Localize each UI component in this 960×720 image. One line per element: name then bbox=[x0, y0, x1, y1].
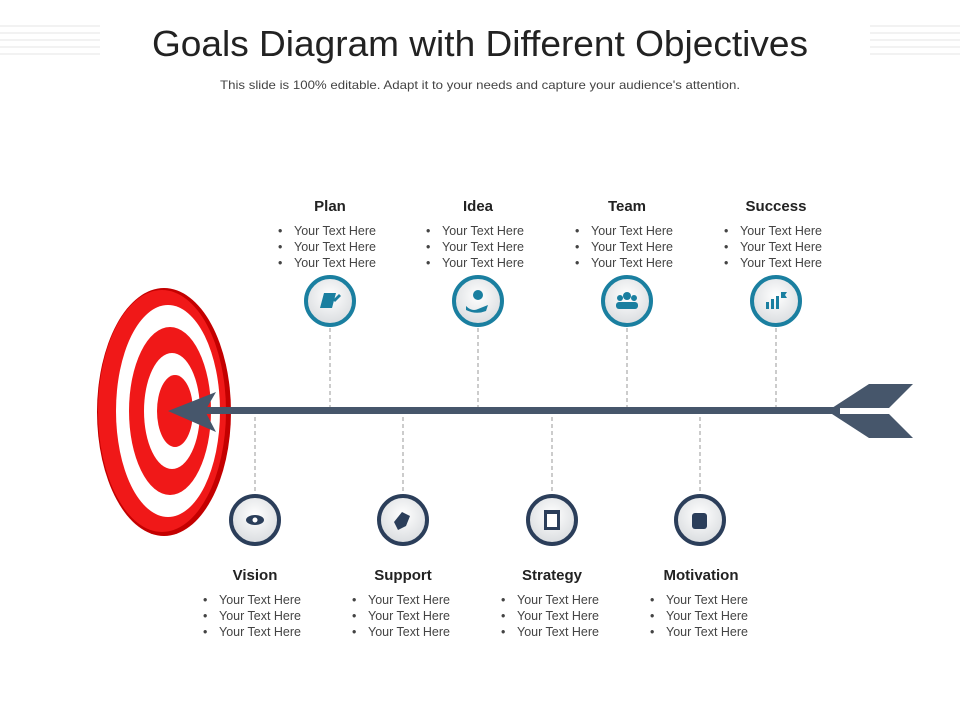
item: Idea: • bbox=[426, 224, 430, 238]
item: Support: • bbox=[352, 625, 356, 639]
top items bbox=[278, 198, 822, 325]
item: Strategy: Your Text Here bbox=[517, 593, 599, 607]
item: Team bbox=[575, 198, 673, 325]
item: Motivation: Your Text Here bbox=[666, 625, 748, 639]
item: Idea: Your Text Here bbox=[442, 240, 524, 254]
item: Support: Support bbox=[374, 567, 432, 584]
icon: target bbox=[97, 288, 231, 536]
item: Success: Your Text Here bbox=[740, 240, 822, 254]
item: Motivation bbox=[650, 496, 748, 639]
item: Motivation: • bbox=[650, 625, 654, 639]
item: Motivation: Motivation bbox=[664, 567, 738, 584]
item: Idea bbox=[426, 198, 524, 325]
item: Vision: Vision bbox=[233, 567, 277, 584]
item: Support: • bbox=[352, 609, 356, 623]
subtitle: This slide is 100% editable. Adapt it to your needs and capture your audience's attention. bbox=[220, 78, 740, 92]
item: Strategy: Your Text Here bbox=[517, 609, 599, 623]
item: Vision: • bbox=[203, 609, 207, 623]
item: Idea: Your Text Here bbox=[442, 256, 524, 270]
item: Plan: Your Text Here bbox=[294, 240, 376, 254]
item: Plan: • bbox=[278, 240, 282, 254]
item: Team: • bbox=[575, 256, 579, 270]
item: Success bbox=[724, 198, 822, 325]
item: Vision: • bbox=[203, 625, 207, 639]
item: Strategy: • bbox=[501, 625, 505, 639]
item: Team: • bbox=[575, 240, 579, 254]
item: Success: • bbox=[724, 224, 728, 238]
dashed connectors bbox=[255, 328, 776, 493]
item: Motivation: Your Text Here bbox=[666, 593, 748, 607]
item: Strategy: • bbox=[501, 593, 505, 607]
item: Plan: Your Text Here bbox=[294, 256, 376, 270]
item: Success: Success bbox=[746, 198, 806, 215]
item: Team: Team bbox=[608, 198, 646, 215]
item: Success: Your Text Here bbox=[740, 256, 822, 270]
item: Success: Your Text Here bbox=[740, 224, 822, 238]
item: Vision: Your Text Here bbox=[219, 625, 301, 639]
item: Plan: Plan bbox=[314, 198, 346, 215]
arrow bbox=[168, 384, 913, 438]
item: Plan: • bbox=[278, 256, 282, 270]
item: Team: Your Text Here bbox=[591, 240, 673, 254]
item: Plan bbox=[278, 198, 376, 325]
item: Vision: Your Text Here bbox=[219, 609, 301, 623]
item: Idea: Your Text Here bbox=[442, 224, 524, 238]
bottom items bbox=[203, 496, 748, 639]
item: Team: Your Text Here bbox=[591, 256, 673, 270]
item: Strategy: Your Text Here bbox=[517, 625, 599, 639]
item: Idea: • bbox=[426, 240, 430, 254]
item: Team: • bbox=[575, 224, 579, 238]
item: Motivation: Your Text Here bbox=[666, 609, 748, 623]
item: Strategy: Strategy bbox=[522, 567, 583, 584]
item: Strategy: • bbox=[501, 609, 505, 623]
item: Support: • bbox=[352, 593, 356, 607]
title: Goals Diagram with Different Objectives bbox=[152, 23, 808, 64]
item: Plan: • bbox=[278, 224, 282, 238]
item: Plan: Your Text Here bbox=[294, 224, 376, 238]
item: Vision: Your Text Here bbox=[219, 593, 301, 607]
item: Team: Your Text Here bbox=[591, 224, 673, 238]
item: Support: Your Text Here bbox=[368, 593, 450, 607]
item: Support bbox=[352, 496, 450, 639]
item: Motivation: • bbox=[650, 593, 654, 607]
item: Idea: Idea bbox=[463, 198, 494, 215]
item: Strategy bbox=[501, 496, 599, 639]
item: Vision bbox=[203, 496, 301, 639]
item: Success: • bbox=[724, 256, 728, 270]
item: Vision: • bbox=[203, 593, 207, 607]
item: Support: Your Text Here bbox=[368, 609, 450, 623]
item: Support: Your Text Here bbox=[368, 625, 450, 639]
item: Success: • bbox=[724, 240, 728, 254]
item: Motivation: • bbox=[650, 609, 654, 623]
item: Idea: • bbox=[426, 256, 430, 270]
